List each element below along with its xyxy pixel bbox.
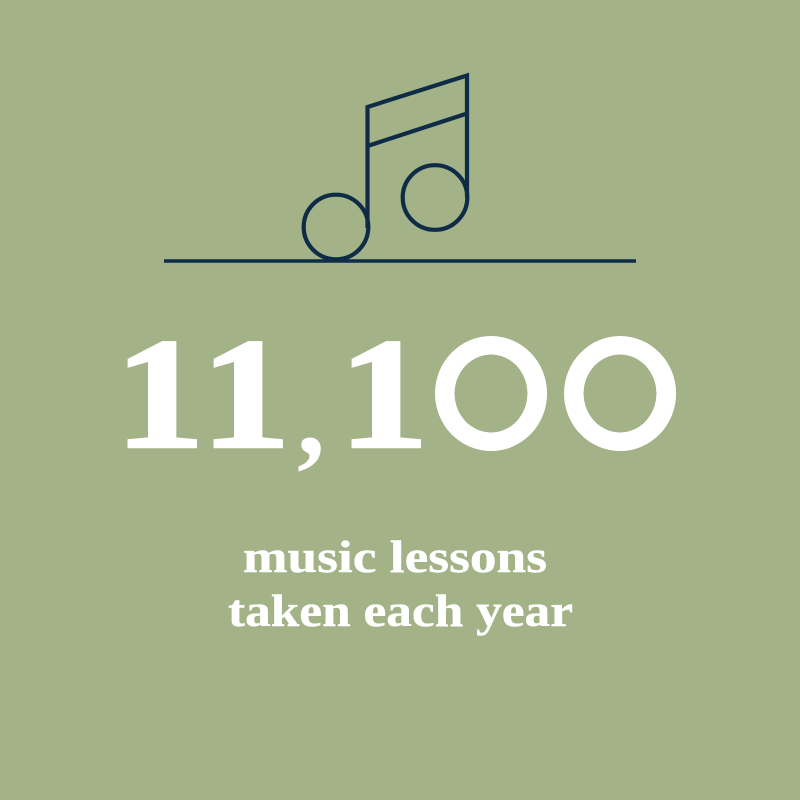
icon: music note on line — [164, 76, 636, 261]
headline number: 0 — [561, 307, 693, 483]
caption: music lessons — [243, 531, 547, 582]
headline number: 0 — [432, 307, 564, 483]
caption: taken each year — [228, 585, 573, 636]
headline number: 1 — [114, 306, 205, 482]
graphic and text — [128, 72, 676, 636]
headline number: 1 — [338, 306, 429, 482]
headline number: , — [297, 355, 325, 479]
headline number: 1 — [200, 306, 291, 482]
headline number — [128, 336, 676, 472]
caption — [228, 531, 573, 636]
